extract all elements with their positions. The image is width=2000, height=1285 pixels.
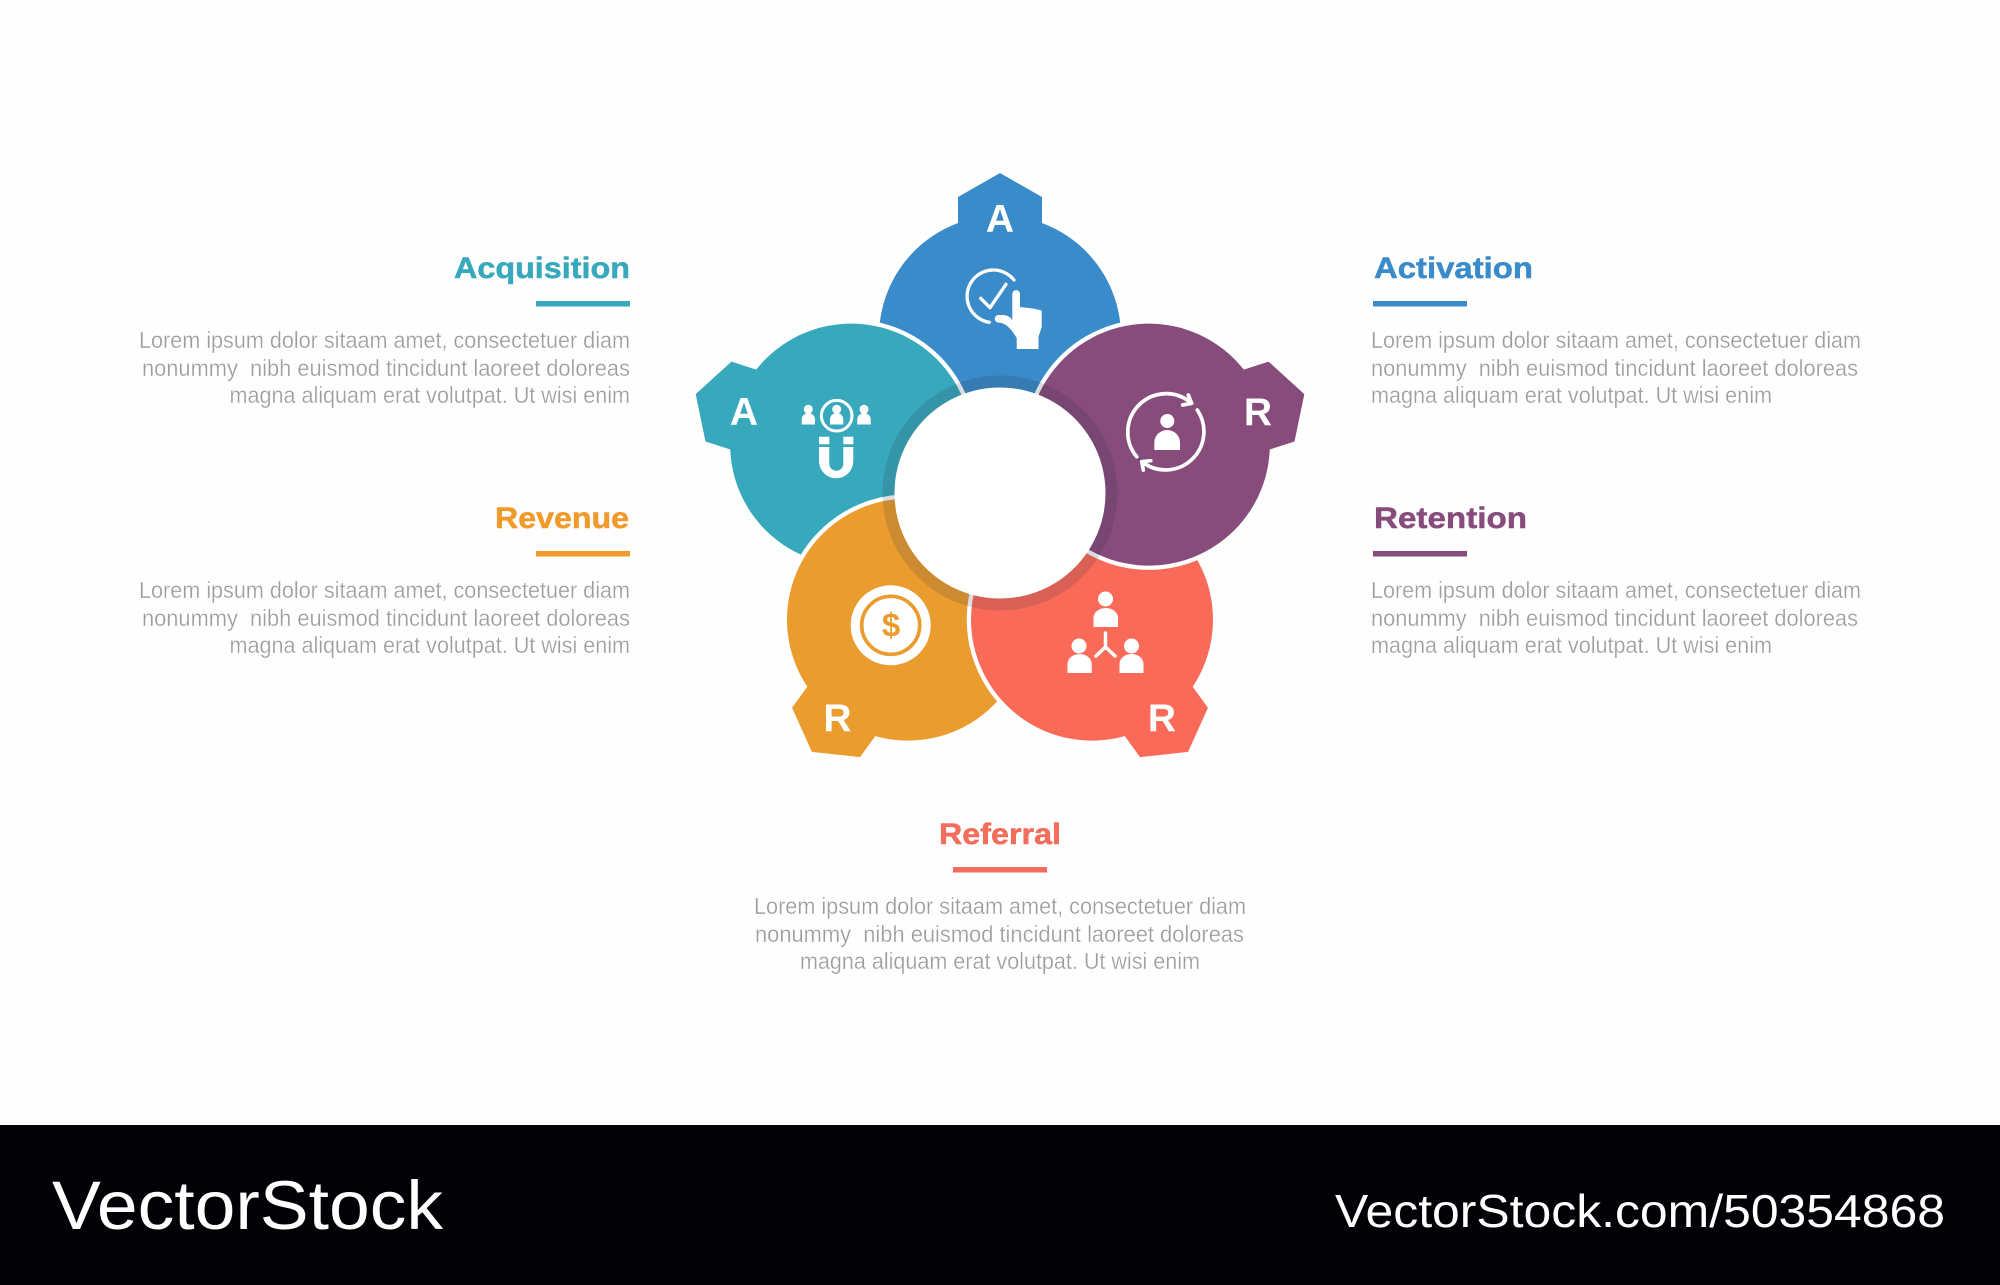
text block: Revenue: magna aliquam erat volutpat. Ut wisi enim <box>230 632 630 658</box>
text block: Referral: Lorem ipsum dolor sitaam amet, consectetuer diam <box>754 893 1246 919</box>
petal: Activation: A <box>986 198 1014 241</box>
text block: Activation: Lorem ipsum dolor sitaam amet, consectetuer diam <box>1371 327 1861 353</box>
text block: Retention: Retention <box>1374 502 1527 535</box>
text block: Retention <box>1371 502 1861 658</box>
text block: Referral: magna aliquam erat volutpat. Ut wisi enim <box>800 948 1200 974</box>
petal: Referral: R <box>1148 697 1176 740</box>
petal: Revenue: R <box>823 697 852 740</box>
icon: dollar coin: $ <box>882 607 900 644</box>
footer url text: VectorStock.com/50354868 <box>1335 1185 1945 1237</box>
icon: magnet attracting people <box>802 400 871 478</box>
text block: Acquisition <box>139 252 630 408</box>
text block: Acquisition: magna aliquam erat volutpat. Ut wisi enim <box>230 382 630 408</box>
petal: Acquisition <box>658 279 1004 597</box>
text block: Acquisition: Lorem ipsum dolor sitaam amet, consectetuer diam <box>139 327 630 353</box>
text block: Retention: nonummy nibh euismod tincidunt laoreet doloreas <box>1371 605 1858 631</box>
petal: Referral <box>923 451 1286 823</box>
petal: Activation <box>879 173 1121 457</box>
petal: Retention: R <box>1244 391 1272 434</box>
text block: Referral: Referral <box>939 818 1061 851</box>
text block: Activation: Activation <box>1374 252 1533 285</box>
petal: Revenue <box>714 451 1077 823</box>
text block: Referral <box>754 818 1246 974</box>
panel: five petal diagram <box>658 173 1342 823</box>
text block: Acquisition: nonummy nibh euismod tincidunt laoreet doloreas <box>142 355 630 381</box>
text block: Retention: Lorem ipsum dolor sitaam amet, consectetuer diam <box>1371 577 1861 603</box>
icon: referral people network <box>1068 592 1144 673</box>
text block: Activation <box>1371 252 1861 408</box>
petal: Acquisition: A <box>730 391 758 434</box>
text block: Activation: magna aliquam erat volutpat. Ut wisi enim <box>1371 382 1772 408</box>
footer logo text: VectorStock <box>52 1167 444 1244</box>
icon: hand tapping check <box>967 270 1042 349</box>
petal: Retention <box>996 279 1342 597</box>
center ring <box>888 382 1112 604</box>
text block: Activation: nonummy nibh euismod tincidunt laoreet doloreas <box>1371 355 1858 381</box>
text block: Acquisition: Acquisition <box>454 252 630 285</box>
icon: person in cycle arrows <box>1128 394 1204 470</box>
footer band <box>0 1125 2000 1285</box>
text block: Revenue: Lorem ipsum dolor sitaam amet, consectetuer diam <box>139 577 630 603</box>
text block: Revenue: nonummy nibh euismod tincidunt laoreet doloreas <box>142 605 630 631</box>
text block: Revenue <box>139 502 630 658</box>
icon: dollar coin <box>851 585 931 665</box>
text block: Referral: nonummy nibh euismod tincidunt laoreet doloreas <box>755 921 1244 947</box>
text block: Revenue: Revenue <box>495 502 629 535</box>
text block: Retention: magna aliquam erat volutpat. Ut wisi enim <box>1371 632 1772 658</box>
